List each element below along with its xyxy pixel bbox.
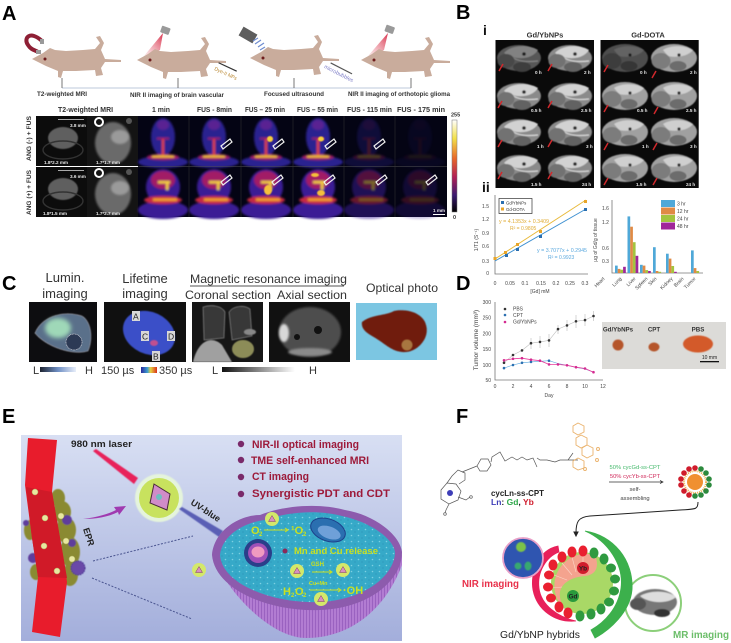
magnetic resonance imaging heading: Magnetic resonance imaging — [190, 272, 347, 286]
column headers: FUS – 25 min — [245, 105, 285, 114]
panel B ii: biodistribution bar chart: μg of Gd/g of tissue — [593, 218, 599, 262]
panel B ii: relaxivity line chart — [474, 179, 589, 295]
panel D: excised tumor photo: PBS — [692, 326, 704, 334]
panel B i: MRI grids — [483, 22, 699, 188]
panel D: excised tumor photo — [602, 322, 726, 369]
organ labels: Kidney — [659, 276, 675, 291]
nucleus organelle — [244, 539, 272, 567]
molecule name — [491, 488, 545, 507]
panel B ii: biodistribution bar chart: 1.6 — [602, 206, 609, 212]
Gd/YbNPs image grid: 2.5 h — [581, 108, 592, 113]
Gd-DOTA image grid: 0 h — [640, 70, 647, 75]
panel D: tumor volume line chart: 200 — [483, 332, 491, 338]
Gd-DOTA image grid: 24 h — [686, 182, 695, 187]
mouse with glioma NIR II camera — [361, 25, 450, 79]
Gd-DOTA image grid: 1 h — [642, 144, 649, 149]
mouse with MRI magnet — [26, 36, 121, 78]
panel D: excised tumor photo: 10 mm — [702, 355, 717, 361]
Gd-DOTA image grid: 1.5 h — [636, 182, 647, 187]
feature list — [238, 439, 390, 500]
scale bars: L — [33, 365, 39, 377]
reaction labels: 2 — [291, 593, 295, 599]
hybrids label: Gd/YbNP hybrids — [500, 630, 580, 641]
mouse with focused ultrasound transducer — [239, 27, 356, 84]
chart legend: Gd/YbNPs — [513, 320, 537, 326]
panel label A: A — [2, 3, 16, 25]
reaction arrows — [264, 528, 341, 592]
luminescence imaging: Lumin. — [45, 270, 85, 285]
colour scale — [451, 112, 460, 221]
panel B ii: relaxivity line chart: 1.2 — [482, 217, 489, 223]
panel B ii: relaxivity line chart: 0.05 — [505, 281, 515, 287]
panel D: tumor volume line chart: 2 — [512, 384, 515, 390]
panel D: tumor volume line chart: 0 — [494, 384, 497, 390]
NIR II fluorescence tiles: 1 mm — [433, 208, 445, 213]
Yb core: Yb — [579, 566, 587, 572]
panel D: excised tumor photo: CPT — [648, 326, 660, 334]
lifetime imaging: Lifetime — [122, 271, 168, 286]
panel label F: F — [456, 406, 468, 428]
Gd-DOTA image grid: 0.5 h — [637, 108, 648, 113]
MR imaging label: MR imaging — [673, 629, 729, 641]
self-assembly arrow and labels: 50% cycGd-ss-CPT — [610, 465, 661, 471]
organ labels: Tumor — [683, 276, 698, 291]
optical photo — [356, 281, 438, 360]
panel C: multimodal imaging — [29, 270, 438, 377]
MRI tiles: 1.8*1.5 mm — [43, 211, 67, 216]
axial MRI — [269, 302, 350, 362]
panel B ii: relaxivity line chart: 0.9 — [482, 231, 489, 237]
lifetime imaging: A — [133, 312, 139, 322]
magnetic resonance imaging heading — [185, 272, 347, 302]
sub-label i: i — [483, 22, 487, 38]
panel B ii: biodistribution bar chart — [593, 200, 703, 291]
timeline — [62, 78, 411, 88]
reaction labels: 2 — [259, 532, 263, 538]
panel B ii: biodistribution bar chart: 0.6 — [602, 246, 609, 252]
magnetic resonance imaging heading: Coronal section — [185, 288, 271, 302]
row labels: ANG (-) + FUS — [26, 115, 33, 161]
panel label B: B — [456, 2, 470, 24]
NIR crescent arc — [532, 546, 576, 621]
panel B ii: relaxivity line chart: 0.25 — [565, 281, 575, 287]
MRI tiles: 3.8 mm — [70, 123, 86, 128]
panel B ii: relaxivity line chart: [Gd] mM — [530, 289, 550, 295]
panel B ii: relaxivity line chart: 0.2 — [553, 281, 560, 287]
white arrows on tumour sites — [221, 139, 437, 185]
self-assembly arrow and labels: self- — [630, 487, 641, 493]
reaction labels: O — [251, 525, 260, 537]
panel B ii: relaxivity line chart: 0 — [494, 281, 497, 287]
reaction labels: Mn and Cu release — [294, 546, 378, 557]
panel B ii: relaxivity line chart: R² = 0.9923 — [548, 255, 574, 261]
cycLn-ss-CPT structure — [441, 423, 600, 515]
micelle — [678, 465, 712, 499]
feature list: CT imaging — [252, 471, 309, 483]
molecule name: cycLn-ss-CPT — [491, 488, 545, 498]
reaction labels: 2 — [303, 532, 307, 538]
Gd core: Gd — [568, 594, 578, 600]
organ labels: Brain — [673, 276, 686, 289]
panel B ii: relaxivity line chart: 0.1 — [522, 281, 529, 287]
chart legend — [499, 198, 532, 214]
column headers — [58, 105, 445, 114]
Gd/YbNP hybrid yin-yang particle — [543, 546, 620, 622]
panel D: tumor volume line chart: 10 — [582, 384, 588, 390]
bar legend: 12 hr — [677, 209, 689, 215]
MRI tiles: 1.7*2.7 mm — [96, 211, 120, 216]
reaction labels: ·OH — [343, 585, 363, 597]
scale bars: 350 µs — [159, 365, 193, 377]
panel B ii: relaxivity line chart: 0.6 — [482, 244, 489, 250]
panel D: excised tumor photo: Gd/YbNPs — [603, 326, 634, 334]
chart legend: PBS — [513, 306, 524, 312]
UV-blue beam — [179, 507, 223, 537]
coronal MRI — [192, 302, 263, 362]
panel B ii: relaxivity line chart: 0.3 — [482, 259, 489, 265]
curved connector arrow — [574, 502, 698, 536]
MRI tiles: 1.8*2.2 mm — [44, 160, 68, 165]
magnetic resonance imaging heading: Axial section — [277, 288, 347, 302]
Gd/YbNPs image grid: 2 h — [584, 70, 591, 75]
panel F: molecule and nanoparticle — [441, 423, 729, 641]
row labels: ANG (+) + FUS — [26, 169, 33, 215]
panel D: tumor volume line chart: Tumor volume (mm³) — [473, 310, 480, 370]
Gd-DOTA image grid — [600, 40, 699, 188]
blood vessel — [25, 438, 75, 637]
panel B ii: relaxivity line chart: y = 3.7077x + 0.2945 — [537, 248, 587, 254]
chart legend — [504, 306, 537, 326]
panel E: tumour therapy schematic — [21, 435, 402, 641]
mitochondrion — [307, 514, 349, 546]
panel B ii: relaxivity line chart: R² = 0.9805 — [510, 226, 536, 232]
self-assembly arrow and labels — [609, 465, 663, 502]
purple arrow — [83, 506, 126, 519]
panel B ii: biodistribution bar chart: 1.2 — [602, 220, 609, 226]
panel D: tumor volume line chart: 4 — [530, 384, 533, 390]
Gd/YbNPs image grid: 24 h — [582, 182, 591, 187]
980 nm laser label: 980 nm laser — [71, 439, 132, 450]
panel D: tumor volume line chart: 100 — [483, 363, 491, 369]
Gd-DOTA image grid: 2.5 h — [686, 108, 697, 113]
panel B ii: relaxivity line chart: 1.5 — [482, 204, 489, 210]
mouse with NIR II camera — [137, 25, 240, 82]
reaction labels: H — [283, 586, 291, 598]
column headers: FUS – 55 min — [297, 105, 338, 114]
UV-blue label: UV-blue — [189, 497, 222, 524]
MR image — [625, 575, 681, 631]
scale bars: 150 µs — [101, 365, 135, 377]
timeline labels: NIR II imaging of brain vascular — [130, 92, 224, 99]
reaction labels: ¹O — [291, 525, 304, 537]
feature list: NIR-II optical imaging — [252, 439, 359, 451]
lifetime imaging: imaging — [122, 286, 168, 301]
panel D: tumor volume line chart: 50 — [485, 378, 491, 384]
scale bars: H — [85, 365, 93, 377]
colour scale: 0 — [453, 215, 456, 221]
panel B ii: biodistribution bar chart: 0.3 — [602, 259, 609, 265]
chart legend: Gd-DOTA — [506, 207, 525, 212]
bar legend: 24 hr — [677, 216, 689, 222]
NIR II fluorescence tiles — [138, 116, 447, 219]
organ labels: Spleen — [634, 276, 650, 291]
timeline labels: T2-weighted MRI — [37, 91, 87, 98]
panel D: tumor volume line chart: 250 — [483, 316, 491, 322]
EPR label: EPR — [81, 527, 96, 548]
bar legend — [661, 200, 689, 230]
timeline labels: NIR II imaging of orthotopic glioma — [348, 91, 450, 98]
Gd/YbNPs image grid: 0.5 h — [531, 108, 542, 113]
upconverting nanoparticle — [135, 474, 183, 522]
panel D: tumor volume line chart — [473, 300, 606, 399]
reaction labels: Cu+Mn — [309, 581, 328, 587]
panel label D: D — [456, 273, 470, 295]
optical photo: Optical photo — [366, 281, 438, 295]
lifetime imaging: D — [168, 332, 174, 342]
panel A: imaging workflow schematic — [26, 25, 450, 99]
panel B ii: relaxivity line chart: 1/T1 (S⁻¹) — [474, 228, 480, 251]
scale bars — [33, 365, 317, 377]
panel label C: C — [2, 273, 16, 295]
scale bars: L — [212, 365, 218, 377]
row labels — [26, 115, 33, 215]
reaction labels — [251, 525, 378, 599]
panel B ii: relaxivity line chart: 0.15 — [536, 281, 546, 287]
colour scale: 255 — [451, 112, 460, 118]
panel B ii: relaxivity line chart: y = 4.1353x + 0.3409 — [499, 219, 549, 225]
EPR nanoparticle cluster — [23, 489, 85, 586]
panel B ii: relaxivity line chart: 0 — [486, 271, 489, 277]
panel D: tumor volume line chart: Day — [545, 393, 554, 399]
organ labels: Lung — [611, 276, 624, 288]
MRI tiles: 1.7*1.7 mm — [96, 160, 120, 165]
bar legend: 48 hr — [677, 224, 689, 230]
panel A: time-series image strip — [26, 105, 460, 221]
Gd-DOTA heading: Gd-DOTA — [631, 30, 665, 40]
molecule name: Ln: Gd, Yb — [491, 497, 534, 507]
MR crescent arc — [585, 531, 632, 638]
small nanoparticle — [192, 563, 206, 577]
lifetime imaging: C — [142, 332, 148, 342]
Gd/YbNPs image grid: 1.5 h — [531, 182, 542, 187]
chart legend: CPT — [513, 313, 523, 319]
panel D: tumor volume line chart: 6 — [548, 384, 551, 390]
panel label E: E — [2, 406, 15, 428]
self-assembly arrow and labels: 50% cycYb-ss-CPT — [610, 474, 661, 480]
lifetime imaging — [104, 271, 186, 363]
reaction labels: O — [295, 586, 304, 598]
organ labels: Liver — [626, 276, 638, 288]
Gd/YbNPs image grid — [496, 40, 594, 188]
Gd/YbNPs image grid: 0 h — [535, 70, 542, 75]
panel D: tumor volume line chart: 150 — [483, 347, 491, 353]
panel B ii: relaxivity line chart: 0.3 — [582, 281, 589, 287]
Gd-DOTA image grid: 3 h — [690, 144, 697, 149]
organ labels: Skin — [647, 276, 659, 287]
luminescence imaging: imaging — [42, 286, 88, 301]
Gd/YbNPs image grid: 1 h — [537, 144, 544, 149]
chart legend: Gd/YbNPs — [506, 200, 526, 206]
MRI tiles — [36, 116, 138, 217]
panel D: tumor volume line chart: 12 — [600, 384, 606, 390]
reaction labels: GSH — [311, 562, 324, 568]
NIR image — [503, 538, 543, 578]
column headers: FUS - 175 min — [397, 105, 445, 114]
lifetime imaging: B — [153, 352, 159, 362]
Gd-DOTA image grid: 2 h — [690, 70, 697, 75]
feature list: Synergistic PDT and CDT — [252, 488, 390, 500]
laser beam — [93, 449, 138, 484]
self-assembly arrow and labels: assembling — [620, 496, 650, 502]
column headers: 1 min — [152, 105, 170, 114]
feature list: TME self-enhanced MRI — [251, 455, 369, 467]
organ labels: Heart — [594, 276, 607, 289]
MRI tiles: 3.6 mm — [70, 174, 86, 179]
Gd/YbNPs image grid: 3 h — [586, 144, 593, 149]
NIR imaging label: NIR imaging — [462, 578, 519, 590]
timeline labels — [37, 91, 450, 99]
column headers: FUS - 115 min — [347, 105, 392, 114]
panel D: tumor volume line chart: 8 — [566, 384, 569, 390]
panel D: tumor volume line chart: 300 — [483, 300, 491, 306]
column headers: FUS - 8min — [197, 105, 232, 114]
mouse with NIR II camera: Dye-II NPs — [213, 66, 238, 82]
organ labels — [594, 276, 698, 291]
sub-label ii: ii — [482, 179, 490, 195]
scale bars: H — [309, 365, 317, 377]
column headers: T2-weighted MRI — [58, 105, 113, 114]
Gd/YbNPs heading: Gd/YbNPs — [527, 30, 563, 40]
tumour cell — [212, 506, 402, 638]
luminescence imaging — [29, 270, 97, 362]
timeline labels: Focused ultrasound — [264, 91, 324, 98]
dashed zoom lines — [92, 536, 193, 619]
bar legend: 3 hr — [677, 202, 686, 208]
reaction labels: 2 — [303, 593, 307, 599]
mouse with focused ultrasound transducer: microbubbles — [323, 64, 354, 84]
